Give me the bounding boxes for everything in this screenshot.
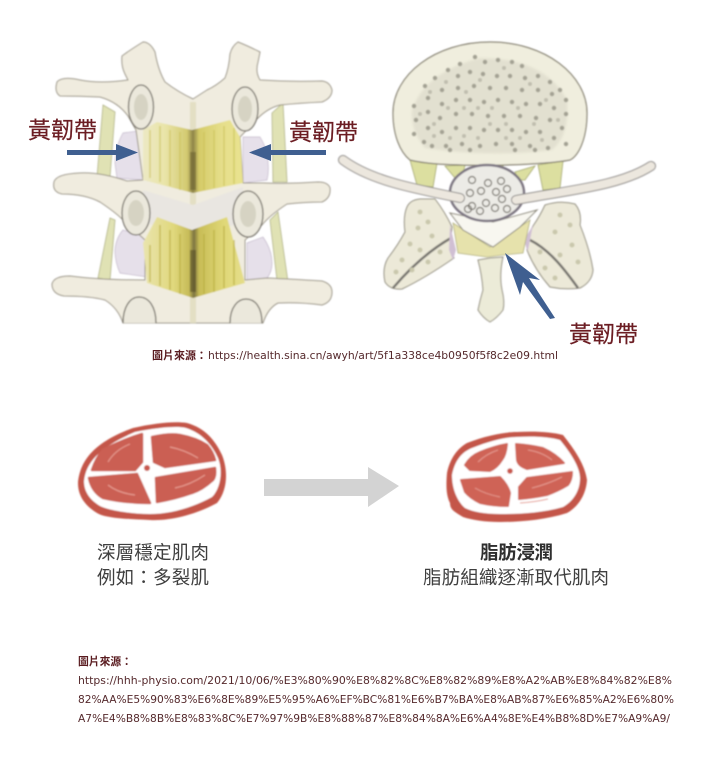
image source block 2 [78,654,674,725]
image source block 2: 82%AA%E5%90%83%E6%8E%89%E5%95%A6%EF%BC%81%E6%B7%BA%E8%AB%87%E6%85%A2%E6%80% [78,694,674,706]
icon: fat-infiltrated muscle cross-section [446,432,587,522]
caption left: 例如：多裂肌 [97,567,209,588]
purple capsules [449,225,456,260]
vertebral body [393,42,587,165]
caption left [97,542,209,588]
ligamentum flavum [453,220,530,257]
trabecular speckle [414,57,566,150]
image source line 1: 圖片來源： [152,348,207,362]
spinal canal with nerve roots [450,165,524,221]
caption left: 深層穩定肌肉 [97,542,209,563]
purple facet capsules [115,130,272,280]
grey arrow [264,467,399,507]
illustration: posterior view of lumbar spine [52,42,332,323]
spinous process [478,257,504,322]
facet ovals [122,85,263,323]
right nerve [516,166,651,200]
left nerve [343,160,460,198]
meat fibres [108,444,205,495]
left arrow pointing to ligament [67,144,138,161]
right arrow pointing to ligament [249,144,326,161]
upper ligamentum flavum [143,120,243,193]
lower ligamentum flavum [143,217,245,298]
image source line 1: https://health.sina.cn/awyh/art/5f1a338ce4b0950f5f8c2e09.html [208,350,558,362]
upper ligaments [410,160,563,190]
lamina speckle [396,212,578,278]
left lamina [384,199,454,289]
meat fibres [475,450,562,503]
label right: 黃韌帶 [289,119,358,145]
illustration: axial view of vertebra [343,42,651,322]
vertebral bone silhouette [52,42,332,323]
right lamina [527,202,593,289]
label bottom right: 黃韌帶 [569,321,638,347]
arrow to ligamentum flavum [505,253,555,319]
caption right: 脂肪浸潤 [480,542,553,563]
icon: healthy muscle cross-section [78,422,226,520]
trabecular mottling [412,58,567,154]
image source block 2: A7%E4%B8%8B%E8%83%8C%E7%97%9B%E8%88%87%E8%84%8A%E6%A4%8E%E4%B8%8D%E7%A9%A9/ [78,713,670,725]
image source block 2: https://hhh-physio.com/2021/10/06/%E3%80%90%E8%82%8C%E8%82%89%E8%A2%AB%E8%84%82%E8% [78,675,672,687]
label left: 黃韌帶 [28,117,97,143]
central fold shading [190,102,196,323]
side ligaments [97,103,288,282]
oval centres [128,94,256,227]
caption right [423,542,609,588]
image source block 2: 圖片來源： [78,654,132,668]
caption right: 脂肪組織逐漸取代肌肉 [423,567,609,588]
epidural space [450,210,537,247]
